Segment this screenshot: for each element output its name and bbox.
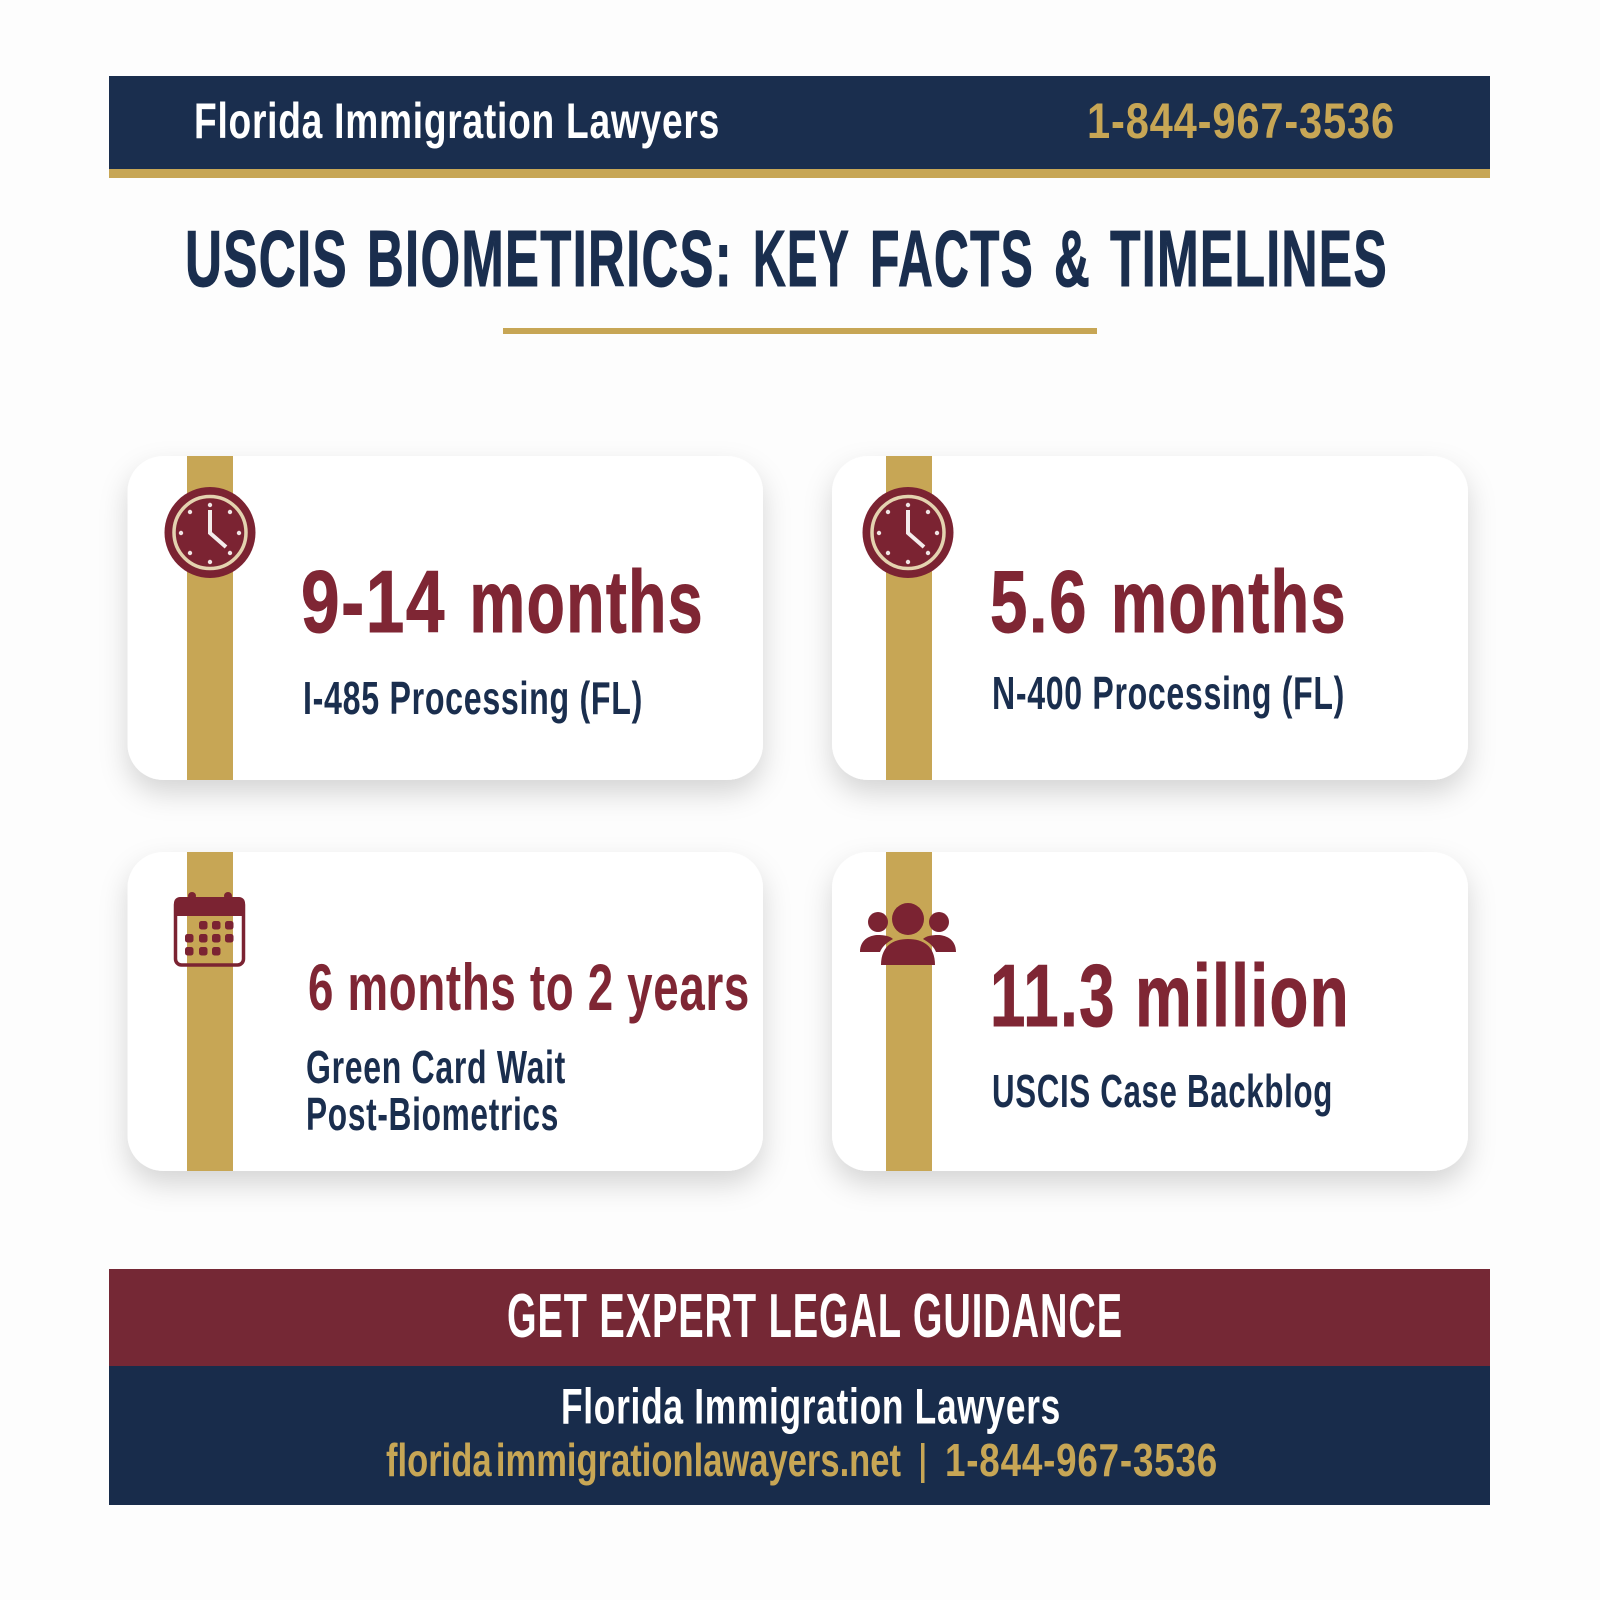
stat label [306,1041,566,1140]
panel: case backlog [832,852,1468,1171]
header banner [109,76,1490,178]
footer call to action [109,1269,1490,1366]
panel: N-400 processing [832,456,1468,780]
title: TIMELINES [1110,214,1388,303]
title: & [1054,214,1091,303]
stat value: 6 months to 2 years [308,950,750,1024]
stat label: USCIS Case Backblog [992,1065,1333,1117]
icon: people [860,903,956,965]
stat label: N-400 Processing (FL) [992,667,1345,719]
title: BIOMETIRICS: [367,214,733,303]
panel: I-485 processing [128,456,763,780]
title underline [503,328,1097,334]
firm name: Florida Immigration Lawyers [561,1378,1061,1434]
stat label: I-485 Processing (FL) [303,672,643,724]
stat label: Green Card Wait [306,1041,566,1093]
cta heading: GET EXPERT LEGAL GUIDANCE [507,1282,1123,1351]
firm name: Florida Immigration Lawyers [194,93,720,149]
stat value: months [470,552,704,651]
website: florida immigrationlawayers.net [386,1434,901,1486]
stat value: months [1111,552,1347,651]
phone number: 1-844-967-3536 [945,1434,1218,1486]
panel: green card wait [128,852,763,1171]
stat value: 11.3 million [990,946,1350,1045]
icon: calendar [174,892,245,965]
phone number: 1-844-967-3536 [1087,93,1395,149]
separator [921,1443,924,1483]
stat value [301,552,704,651]
stat value: 9-14 [301,552,446,651]
icon: clock [862,487,954,578]
title: KEY [753,214,850,303]
title: FACTS [870,214,1034,303]
footer contact block [109,1366,1490,1505]
title: USCIS [185,214,348,303]
stat value [990,552,1347,651]
stat label: Post-Biometrics [306,1088,559,1140]
stat value: 5.6 [990,552,1088,651]
icon: clock [164,487,256,578]
title [185,214,1388,303]
